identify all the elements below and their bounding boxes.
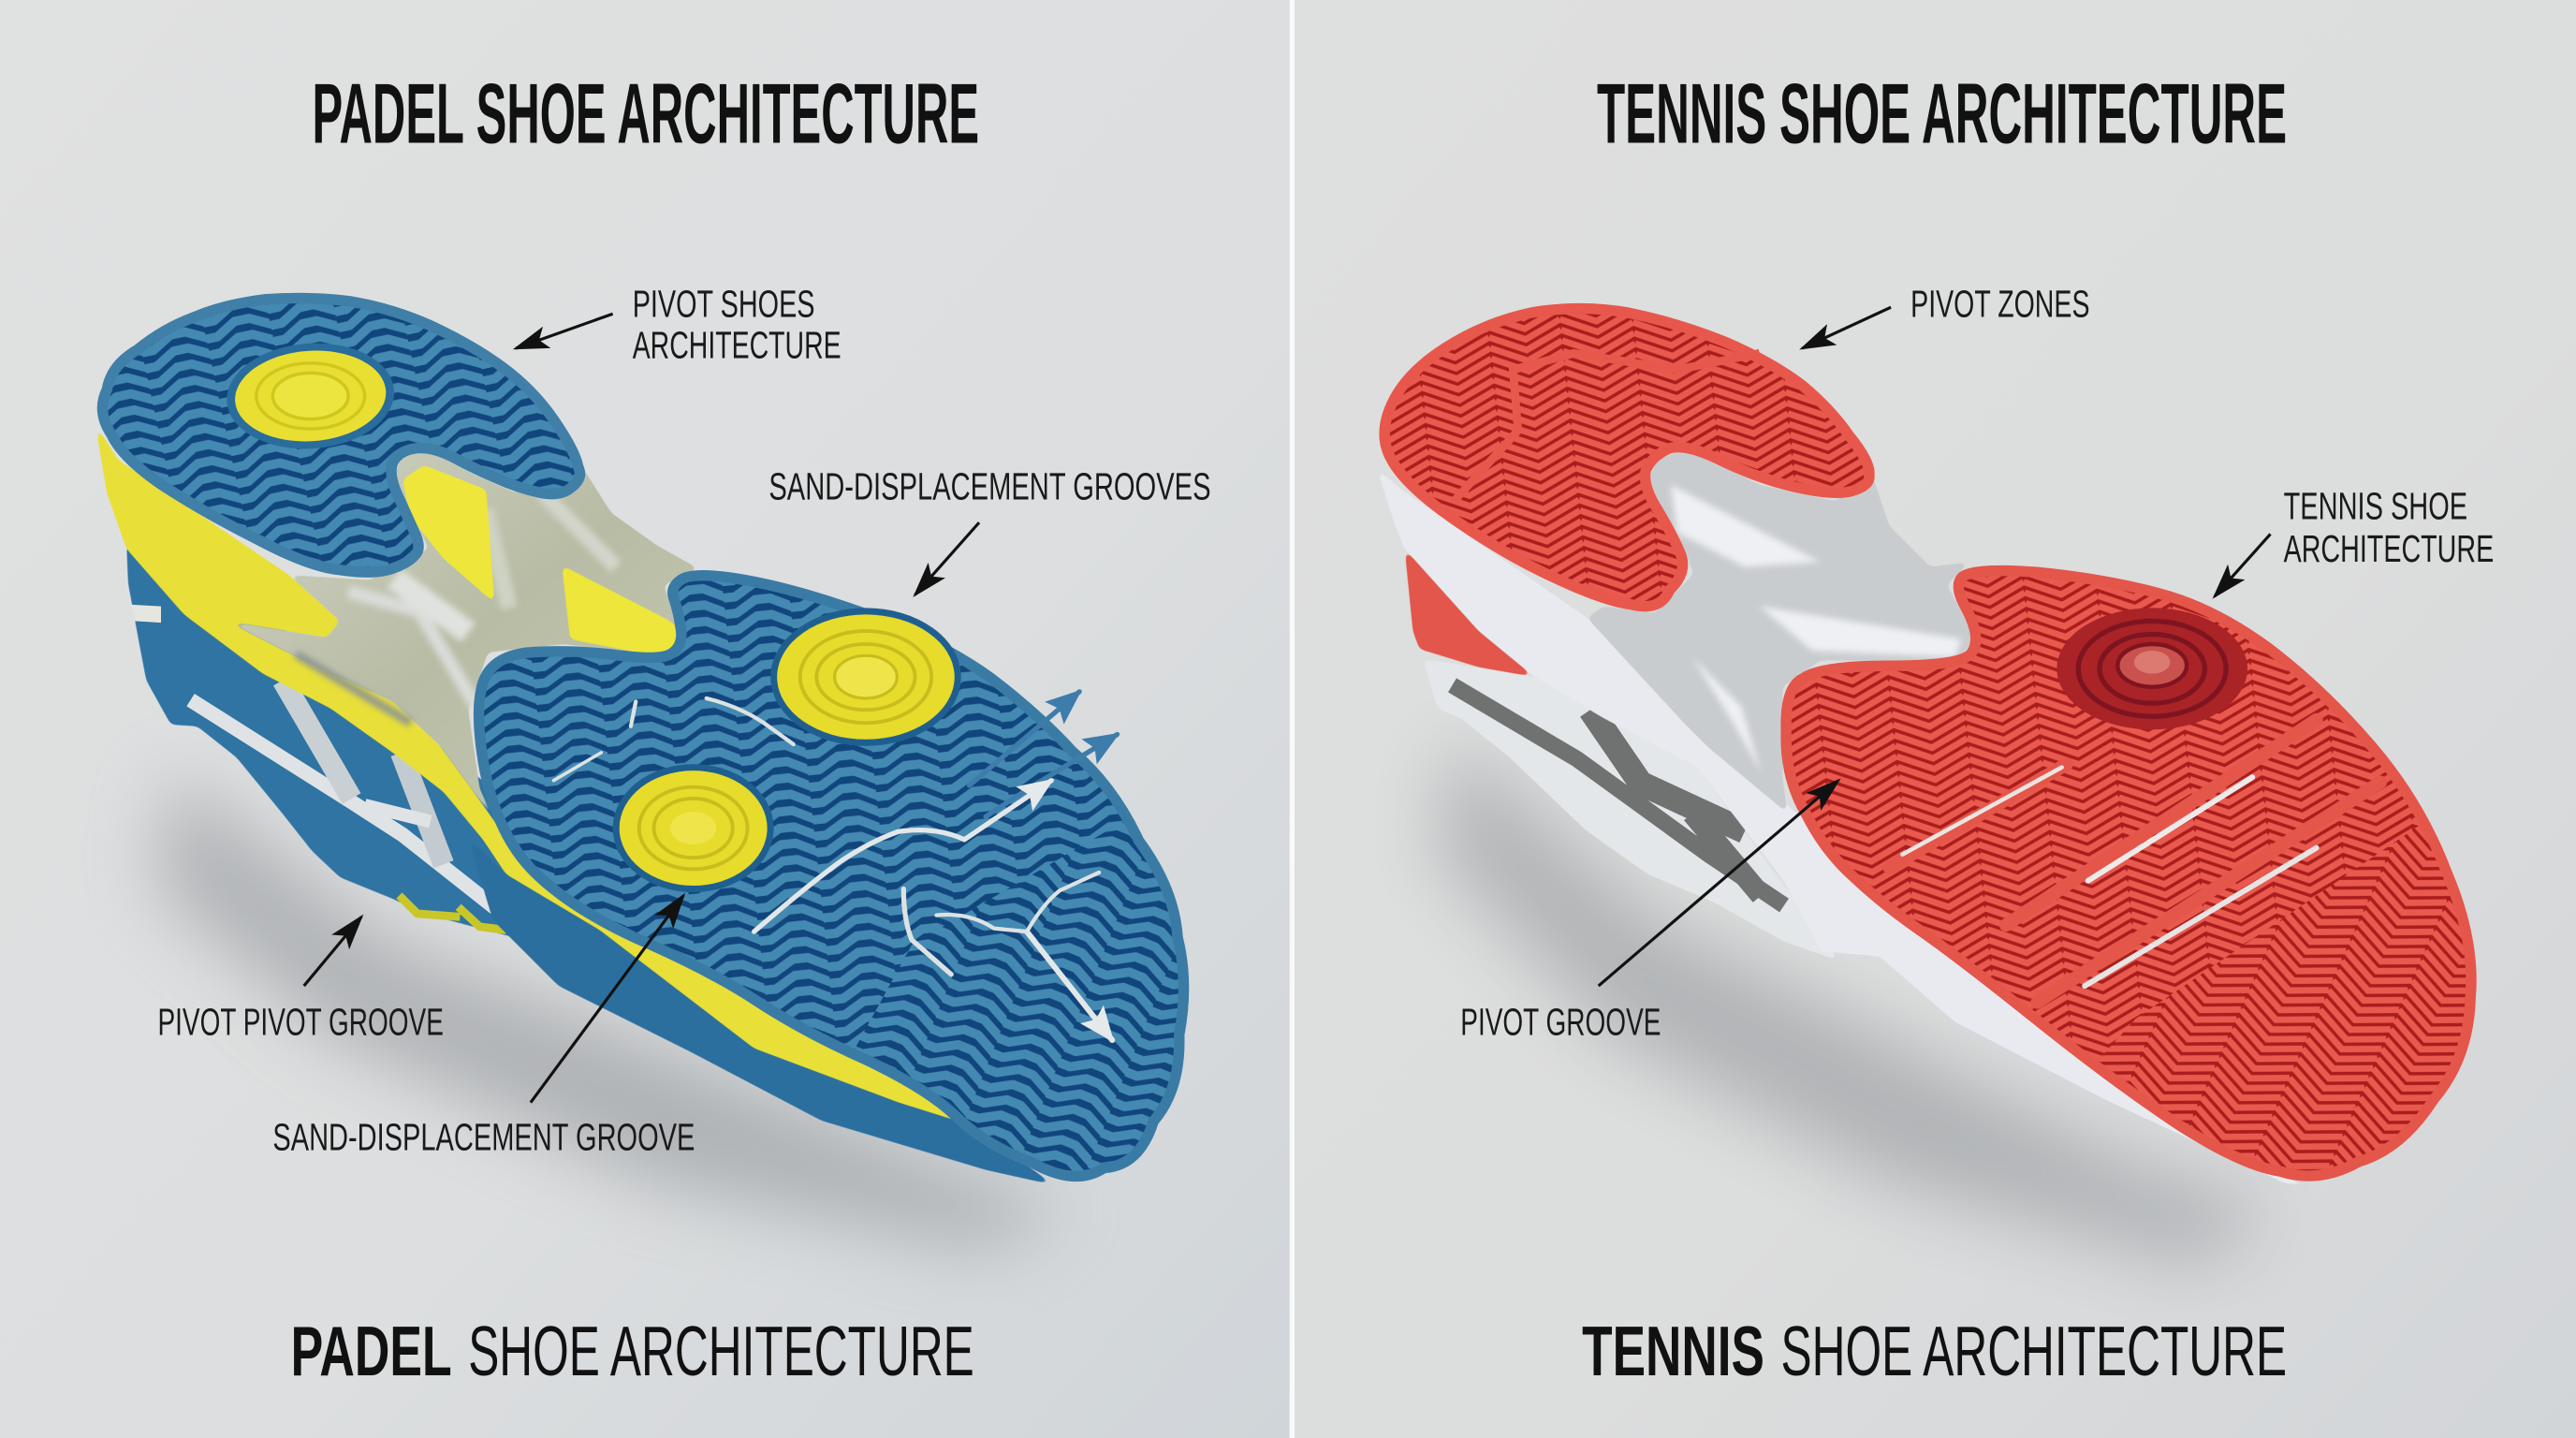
label: pivot shoes architecture: PIVOT SHOES <box>633 283 815 326</box>
pivot disc: tennis red rings <box>2056 608 2247 729</box>
label: sand-displacement groove: SAND-DISPLACEMENT GROOVE <box>272 1116 695 1159</box>
channel: heel groove <box>1454 353 1760 501</box>
midsole: yellow band <box>95 424 973 1125</box>
label: tennis shoe architecture: TENNIS SHOE <box>2284 485 2467 528</box>
tread: tennis heel <box>1389 314 1865 601</box>
arrow: sand-displacement grooves <box>915 522 979 594</box>
logo: white upper stripes <box>191 681 496 909</box>
pivot disc: heel <box>224 338 398 454</box>
tread: padel heel <box>109 303 575 567</box>
outsole: padel forefoot <box>474 570 1189 1181</box>
arrow: sand-displacement groove <box>531 896 683 1103</box>
shank: highlights <box>296 493 616 723</box>
shank: translucent arch <box>1587 448 1976 814</box>
pocket: yellow arch forefoot <box>562 565 695 655</box>
pocket: yellow arch heel <box>402 465 494 603</box>
panel: tennis background <box>1295 0 2576 1438</box>
footer: padel shoe architecture: PADEL <box>291 1312 452 1390</box>
outsole: padel heel <box>97 293 585 578</box>
label: pivot shoes architecture: ARCHITECTURE <box>633 324 842 367</box>
shadow: padel shoe <box>156 772 1068 1249</box>
flow arrows: sand displacement <box>553 692 1117 1040</box>
arrow: pivot pivot groove <box>304 917 361 986</box>
label: pivot groove: PIVOT GROOVE <box>1460 1001 1661 1044</box>
label: tennis shoe architecture <box>2284 485 2494 570</box>
tag: upper heel label <box>131 605 161 623</box>
padel shoe illustration <box>82 279 1208 1249</box>
tread: tennis forefoot <box>1792 576 2466 1170</box>
tread: padel forefoot <box>484 580 1178 1170</box>
grooves: white slits <box>1889 720 2380 1003</box>
label: pivot shoes architecture <box>633 283 842 367</box>
arrow: pivot shoes <box>516 314 613 348</box>
label: pivot pivot groove: PIVOT PIVOT GROOVE <box>157 1001 444 1044</box>
midsole: white band <box>1377 468 2320 1190</box>
label: sand-displacement grooves: SAND-DISPLACEMENT GROOVES <box>768 465 1211 508</box>
shank: white inserts <box>1671 485 1962 772</box>
footer: tennis shoe architecture <box>1582 1312 2287 1390</box>
divider <box>1290 0 1295 1438</box>
footer: padel shoe architecture <box>291 1312 974 1390</box>
label: pivot zones: PIVOT ZONES <box>1910 283 2089 326</box>
footer: padel shoe architecture: SHOE ARCHITECTURE <box>468 1312 974 1390</box>
outsole: tennis heel <box>1379 303 1875 611</box>
heel counter: red <box>1405 549 1534 677</box>
heading: padel top title: PADEL SHOE ARCHITECTURE <box>312 66 979 162</box>
tennis shoe illustration <box>1360 287 2497 1265</box>
logo: grey upper stripes <box>1453 685 1784 905</box>
footer: tennis shoe architecture: TENNIS <box>1582 1312 1764 1390</box>
shadow: tennis shoe <box>1438 740 2267 1265</box>
upper: white mesh upper <box>1423 659 1840 961</box>
arrow: tennis shoe architecture <box>2215 534 2271 596</box>
midsole: outer blue base <box>468 838 1075 1190</box>
shank: translucent arch <box>227 452 698 833</box>
arrow: pivot zones <box>1802 307 1891 348</box>
laces: yellow lace tips <box>399 896 534 945</box>
arrow: pivot groove <box>1599 781 1838 986</box>
pivot disc: forefoot upper <box>770 608 961 746</box>
upper: blue shoe upper <box>126 544 690 986</box>
pivot disc: forefoot lower <box>613 764 774 892</box>
outsole: tennis forefoot <box>1780 565 2477 1181</box>
panel: padel background <box>0 0 1290 1438</box>
label: tennis shoe architecture: ARCHITECTURE <box>2284 527 2494 570</box>
footer: tennis shoe architecture: SHOE ARCHITECTURE <box>1781 1312 2287 1390</box>
